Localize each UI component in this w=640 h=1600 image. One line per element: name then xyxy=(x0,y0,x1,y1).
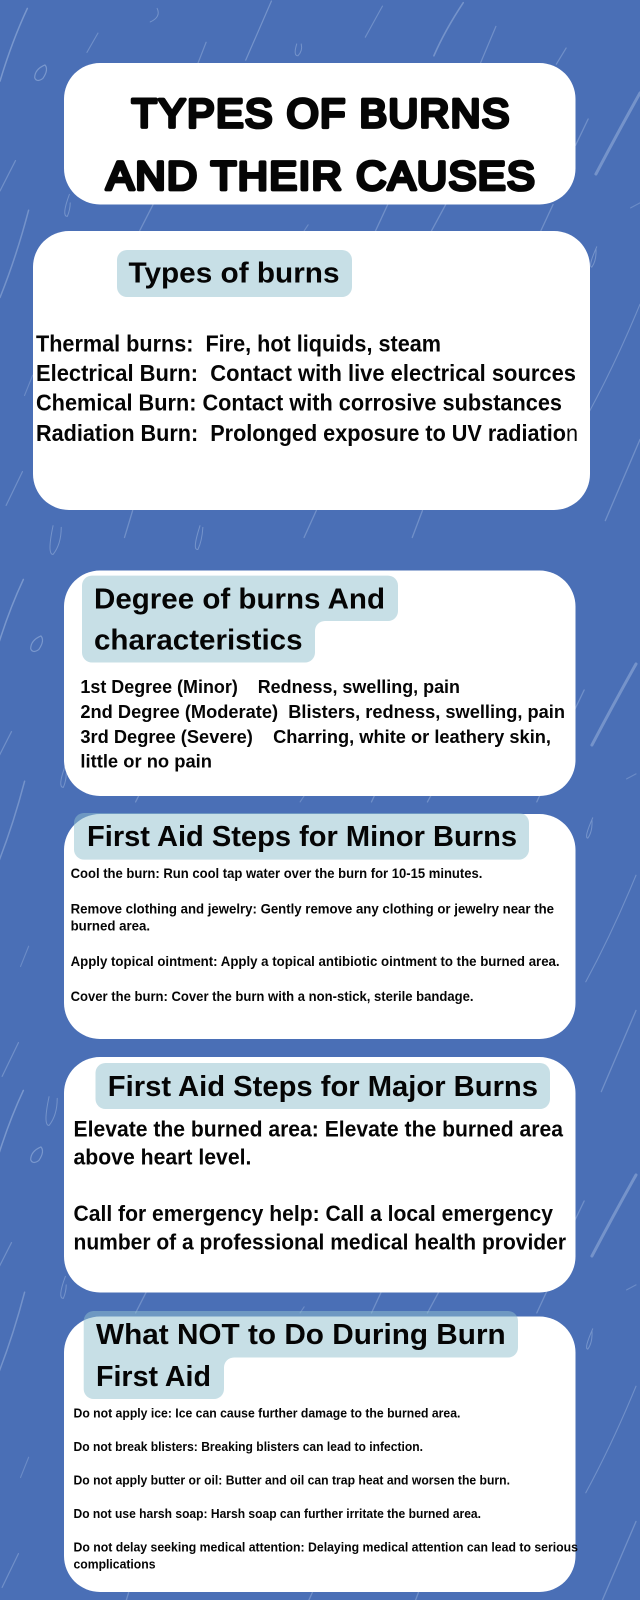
text block: minor burn steps: burned area. xyxy=(71,919,150,934)
text block: what not to do list xyxy=(74,1405,578,1571)
panel: types of burns xyxy=(33,231,590,510)
heading: types of burns xyxy=(117,250,352,297)
title xyxy=(106,92,536,198)
heading: degree of burns: Degree of burns And xyxy=(94,583,385,615)
text block: what not to do list: Do not break blisters: Breaking blisters can lead to infection. xyxy=(74,1439,423,1454)
text block: burn types xyxy=(36,331,578,446)
text block: what not to do list: Do not apply ice: Ice can cause further damage to the burned area. xyxy=(74,1405,460,1420)
text block: minor burn steps: Cover the burn: Cover the burn with a non-stick, sterile bandage. xyxy=(71,989,473,1004)
text block: degrees: 1st Degree (Minor) Redness, swelling, pain xyxy=(80,677,460,697)
text block: minor burn steps: Remove clothing and jewelry: Gently remove any clothing or jewelry near the xyxy=(71,901,554,916)
heading: degree of burns: characteristics xyxy=(94,625,302,657)
text block: what not to do list: complications xyxy=(74,1556,156,1571)
heading: first aid major burns: First Aid Steps for Major Burns xyxy=(108,1071,538,1103)
panel: first aid major burns xyxy=(64,1057,576,1292)
text block: major burn steps: Call for emergency help: Call a local emergency xyxy=(74,1201,554,1226)
text block: degrees xyxy=(80,677,565,772)
text block: minor burn steps: Cool the burn: Run cool tap water over the burn for 10-15 minutes. xyxy=(71,866,482,881)
text block: degrees: 3rd Degree (Severe) Charring, white or leathery skin, xyxy=(80,727,551,747)
text block: degrees: little or no pain xyxy=(80,752,212,772)
heading: what not to do xyxy=(84,1311,518,1399)
text block: what not to do list: Do not delay seeking medical attention: Delaying medical attention can lead to serious xyxy=(74,1540,578,1555)
text block: major burn steps: number of a professional medical health provider xyxy=(74,1229,566,1254)
panel: what not to do xyxy=(64,1311,578,1592)
text block: burn types: Electrical Burn: Contact with live electrical sources xyxy=(36,360,576,386)
text block: major burn steps xyxy=(74,1116,566,1254)
heading: first aid minor burns: First Aid Steps for Minor Burns xyxy=(87,821,517,853)
text block: what not to do list: Do not use harsh soap: Harsh soap can further irritate the burned area. xyxy=(74,1506,481,1521)
panel: degree of burns xyxy=(64,570,576,796)
text block: burn types: Radiation Burn: Prolonged exposure to UV radiation xyxy=(36,420,578,446)
text block: degrees: 2nd Degree (Moderate) Blisters, redness, swelling, pain xyxy=(80,702,565,722)
heading: what not to do: What NOT to Do During Burn xyxy=(96,1319,506,1351)
heading: what not to do: First Aid xyxy=(96,1361,211,1393)
title: TYPES OF BURNS xyxy=(132,92,511,136)
text block: burn types: Chemical Burn: Contact with corrosive substances xyxy=(36,389,562,415)
heading: first aid major burns xyxy=(96,1063,550,1109)
panel: title xyxy=(64,63,576,204)
panel: first aid minor burns xyxy=(64,813,576,1039)
text block: burn types: Thermal burns: Fire, hot liquids, steam xyxy=(36,331,441,357)
text block: minor burn steps xyxy=(71,866,560,1004)
heading: degree of burns xyxy=(82,576,398,662)
heading: types of burns: Types of burns xyxy=(128,258,340,290)
text block: major burn steps: above heart level. xyxy=(74,1144,251,1169)
title: AND THEIR CAUSES xyxy=(106,154,536,198)
heading: first aid minor burns xyxy=(74,813,529,860)
text block: minor burn steps: Apply topical ointment: Apply a topical antibiotic ointment to the burned area. xyxy=(71,954,560,969)
text block: major burn steps: Elevate the burned area: Elevate the burned area xyxy=(74,1116,564,1141)
text block: what not to do list: Do not apply butter or oil: Butter and oil can trap heat and worsen the burn. xyxy=(74,1473,510,1488)
